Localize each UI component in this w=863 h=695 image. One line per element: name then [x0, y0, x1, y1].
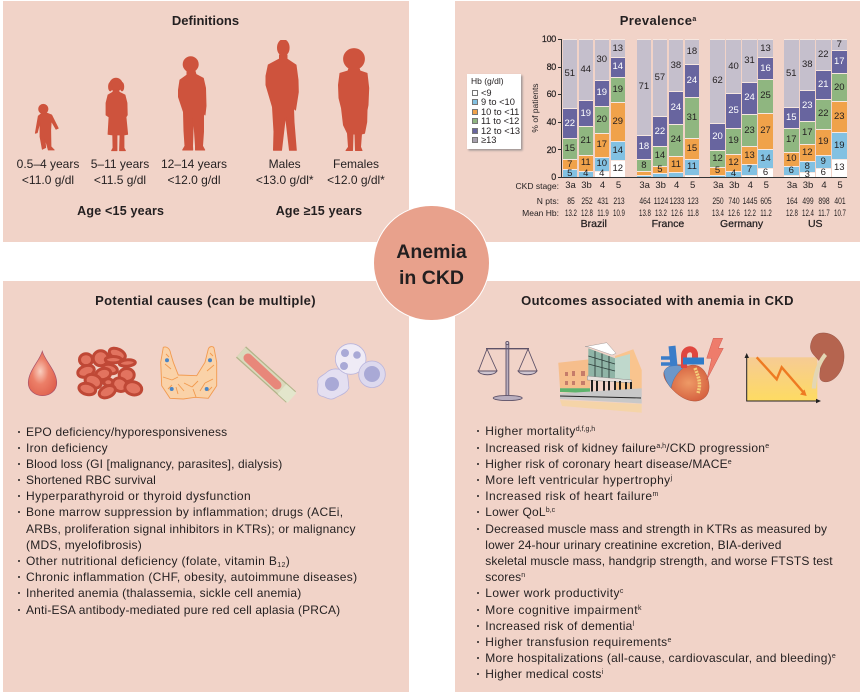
country: Brazil [563, 39, 625, 230]
label: males: Males [269, 157, 301, 171]
country: US: 6 [821, 167, 826, 178]
list: outcomes: Higher mortalityd,f,g,h [485, 424, 595, 438]
y axis labels: 20 [547, 144, 556, 154]
y axis labels: 100 [542, 34, 556, 44]
y axis labels [542, 34, 556, 182]
country: US: 898 [818, 196, 830, 206]
label: females: Females [333, 157, 379, 171]
country: Brazil: 13 [612, 43, 623, 54]
country: US: 6 [789, 165, 794, 176]
country: Brazil: 7 [567, 159, 572, 170]
country: France: 3b [655, 180, 666, 191]
panel: prevalence [455, 1, 860, 242]
list: outcomes: Lower QoLb,c [485, 505, 555, 519]
icon: parathyroid gland [161, 347, 217, 399]
icon: girl [106, 78, 128, 151]
country: US: 21 [818, 79, 829, 90]
label: 12–14 years: <12.0 g/dl [167, 173, 221, 187]
country: US: 3b [803, 180, 813, 191]
country: Brazil: 15 [564, 143, 575, 154]
country: Brazil: Brazil [581, 218, 607, 230]
axis title: % of patients [530, 83, 540, 133]
country: Brazil: 44 [580, 64, 591, 75]
legend: 12 to <13 [481, 126, 520, 136]
country: Brazil: 19 [612, 84, 623, 95]
country: US: 13 [834, 162, 845, 173]
country: Germany: 250 [713, 196, 724, 206]
country: France: 22 [655, 126, 665, 137]
icon: declining chart and kidney [744, 333, 844, 403]
group label: age 15 and over: Age ≥15 years [276, 204, 362, 218]
country: Germany: 3a [713, 180, 724, 191]
country: Germany: 40 [728, 61, 739, 72]
icon: hospital building [558, 343, 642, 413]
label: males: <13.0 g/dl* [256, 173, 314, 187]
country: Brazil: 3a [565, 180, 576, 191]
country: Brazil: 10.9 [613, 208, 624, 218]
label: males [256, 157, 314, 187]
icons: causes [28, 343, 386, 402]
country: Brazil: 29 [612, 116, 623, 127]
country: France: 24 [671, 134, 681, 145]
country: US: 9 [821, 156, 826, 167]
country: Brazil: 21 [580, 135, 591, 146]
country: Germany: 605 [761, 196, 772, 206]
country: Germany: 13.4 [712, 208, 724, 218]
country: Germany: 23 [744, 125, 755, 136]
list: outcomes: Higher medical costsi [485, 667, 603, 681]
country: Brazil: 14 [612, 145, 623, 156]
list: outcomes: Increased risk of kidney failurea,h/CKD progressione [485, 441, 769, 455]
country: US: 12.4 [802, 208, 814, 218]
country: Germany: 13 [744, 150, 755, 161]
country: France: 1124 [653, 196, 668, 206]
country: US: 23 [834, 111, 845, 122]
icon: boy [178, 57, 206, 150]
country: US: 12 [802, 147, 813, 158]
country: US: 20 [834, 82, 845, 93]
country: US: 22 [818, 108, 829, 119]
country: Brazil: 5 [567, 168, 572, 179]
list: outcomes: skeletal muscle mass, handgrip strength, and worse FTSTS test [485, 554, 833, 568]
list: causes: EPO deficiency/hyporesponsiveness [26, 425, 227, 439]
country: France: 1233 [669, 196, 684, 206]
label: 5–11 years: <11.5 g/dl [94, 173, 146, 187]
country: Brazil: 431 [597, 196, 608, 206]
country: US: 38 [802, 59, 813, 70]
country: US: 51 [786, 68, 797, 79]
country: France: 24 [671, 102, 681, 113]
legend: <9 [481, 88, 492, 98]
label: 0.5–4 years [17, 157, 79, 187]
country: France [637, 39, 699, 230]
list: outcomes: More hospitalizations (all-cause, cardiovascular, and bleeding)e [485, 651, 836, 665]
country: Brazil: 4 [599, 168, 604, 179]
country: France: 15 [687, 143, 697, 154]
y axis labels: 80 [547, 62, 556, 72]
panel: outcomes [455, 281, 860, 692]
country: US: 3 [805, 169, 810, 180]
list: causes: Chronic inflammation (CHF, obesity, autoimmune diseases) [26, 570, 357, 584]
country: Brazil: 85 [567, 196, 574, 206]
icon: adult male [266, 40, 298, 150]
country: Brazil: 13.2 [565, 208, 576, 218]
list: outcomes: Lower work productivityc [485, 586, 623, 600]
country: Brazil: 51 [564, 68, 575, 79]
list: outcomes: More left ventricular hypertrophyj [485, 473, 672, 487]
legend: 10 to <11 [481, 107, 519, 117]
row labels: N pts: [537, 196, 559, 206]
icon: adult female [338, 49, 369, 150]
country: France: 3a [639, 180, 650, 191]
country: Brazil: 12 [612, 163, 623, 174]
country: Brazil: 19 [580, 108, 591, 119]
country: Brazil: 213 [613, 196, 624, 206]
country: Germany: 20 [712, 131, 723, 142]
list: causes: Bone marrow suppression by inflammation; drugs (ACEi, [26, 505, 343, 519]
list: causes: ARBs, proliferation signal inhibitors in KTRs); or malignancy [26, 522, 356, 536]
heading: outcomes: Outcomes associated with anemia in CKD [521, 293, 794, 308]
country: France: 13.8 [639, 208, 651, 218]
country: Germany: 19 [728, 135, 739, 146]
panel: potential causes [3, 281, 408, 692]
country: US: 17 [802, 127, 813, 138]
country: Germany: 12 [728, 157, 739, 168]
legend: Hb (g/dl) [471, 76, 504, 86]
country: Brazil: 3b [581, 180, 592, 191]
country: Germany: 740 [729, 196, 740, 206]
heading: prevalence: Prevalencea [620, 13, 696, 28]
stacked bar chart [516, 34, 847, 230]
country: Brazil: 5 [616, 180, 621, 191]
row labels: Mean Hb: [522, 208, 559, 218]
y axis labels: 40 [547, 117, 556, 127]
legend: ≥13 [481, 135, 496, 145]
country: Germany: 25 [728, 105, 739, 116]
icon: heart and lightning [661, 338, 723, 401]
country: Germany: 12 [712, 153, 723, 164]
country: France: 18 [687, 46, 697, 57]
country: Germany: 14 [760, 153, 771, 164]
country: France: 11 [671, 159, 681, 170]
country: US: US [808, 218, 823, 230]
country: Germany: 7 [747, 164, 752, 175]
center circle: Anemia in CKD [373, 205, 490, 321]
country: France: 11 [687, 161, 697, 172]
y axis labels: 60 [547, 89, 556, 99]
label: 5–11 years [91, 157, 149, 187]
list: outcomes: lower 24-hour urinary creatinine excretion, BIA-derived [485, 538, 782, 552]
country: US: 19 [818, 136, 829, 147]
country: Germany: 13 [760, 43, 771, 54]
center circle: Anemia in CKD: in CKD [399, 267, 464, 289]
country: US: 8 [805, 161, 810, 172]
country: US: 15 [786, 112, 797, 123]
panel: definitions [3, 1, 408, 242]
country: France: 18 [639, 141, 649, 152]
country: France: 31 [687, 112, 697, 123]
list: outcomes: Decreased muscle mass and strength in KTRs as measured by [485, 522, 827, 536]
icon: red blood cells [76, 346, 143, 400]
heading: definitions: Definitions [172, 13, 239, 28]
country: Brazil: 17 [596, 139, 607, 150]
list: causes: Inherited anemia (thalassemia, sickle cell anemia) [26, 586, 301, 600]
country: Germany: 11.2 [761, 208, 772, 218]
legend: 11 to <12 [481, 116, 519, 126]
country: Brazil: 22 [564, 118, 575, 129]
icon: white blood cells [318, 344, 385, 399]
country: Germany: 62 [712, 75, 723, 86]
country: France: 8 [641, 160, 647, 171]
list: causes: Blood loss (GI [malignancy, parasites], dialysis) [26, 457, 282, 471]
heading: potential causes: Potential causes (can be multiple) [95, 293, 316, 308]
icons: people silhouettes [34, 40, 370, 152]
list: causes: Shortened RBC survival [26, 473, 156, 487]
icon: scales [478, 342, 537, 401]
country: US: 10 [786, 153, 797, 164]
icon: blood vessel [241, 352, 292, 398]
country: US: 5 [837, 180, 843, 191]
country: France: 5 [690, 180, 695, 191]
country: Germany: Germany [720, 218, 763, 230]
country: Germany: 3b [729, 180, 740, 191]
country: US [784, 39, 847, 230]
country: France: 14 [655, 150, 665, 161]
country: Brazil: 30 [596, 54, 607, 65]
country: France: 13.2 [655, 208, 667, 218]
country: France: 57 [655, 72, 665, 83]
country: Germany: 16 [760, 63, 771, 74]
country: US: 19 [834, 140, 845, 151]
country: France: 11.8 [687, 208, 698, 218]
list: outcomes: Increased risk of heart failurem [485, 489, 658, 503]
country: Germany: 6 [763, 167, 768, 178]
list: outcomes [477, 424, 836, 681]
list: causes: Hyperparathyroid or thyroid dysfunction [26, 489, 251, 503]
country: Brazil: 14 [612, 61, 623, 72]
country: Germany: 12.2 [744, 208, 756, 218]
country: US: 22 [818, 49, 829, 60]
country: Brazil: 4 [600, 180, 605, 191]
label: 5–11 years: 5–11 years [91, 157, 149, 171]
country: US: 12.8 [786, 208, 798, 218]
list: outcomes: Increased risk of demential [485, 619, 634, 633]
country: Germany: 5 [764, 180, 769, 191]
country: US: 10.7 [834, 208, 846, 218]
country: Brazil: 11.9 [597, 208, 608, 218]
country: Brazil: 10 [596, 158, 607, 169]
label: 12–14 years [161, 157, 227, 187]
list: causes: Iron deficiency [26, 441, 108, 455]
country: Germany: 4 [748, 180, 753, 191]
list: outcomes: More cognitive impairmentk [485, 603, 642, 617]
country: US: 401 [834, 196, 846, 206]
country: Germany: 12.6 [728, 208, 740, 218]
icon: toddler [35, 104, 58, 150]
list: outcomes: scoresn [485, 570, 525, 584]
country: Brazil: 11 [581, 157, 591, 168]
country: France: 24 [687, 75, 697, 86]
legend: 9 to <10 [481, 97, 515, 107]
list: causes: (MDS, myelofibrosis) [26, 538, 142, 552]
country: Germany: 27 [760, 125, 771, 136]
country: France: 4 [674, 180, 679, 191]
label: 0.5–4 years: <11.0 g/dl [22, 173, 74, 187]
list: outcomes: Higher transfusion requirementse [485, 635, 671, 649]
country: Germany [710, 39, 773, 230]
country: Germany: 24 [744, 92, 755, 103]
list: causes: Anti-ESA antibody-mediated pure red cell aplasia (PRCA) [26, 603, 340, 617]
center circle: Anemia in CKD: Anemia [396, 241, 467, 263]
country: Germany: 4 [731, 168, 736, 179]
country: Germany: 31 [744, 55, 755, 66]
country: US: 4 [821, 180, 827, 191]
country: Brazil: 252 [581, 196, 592, 206]
country: US: 17 [786, 134, 797, 145]
icons: outcomes [477, 332, 844, 413]
country: US: 17 [834, 56, 845, 67]
country: US: 11.7 [818, 208, 830, 218]
list: causes [18, 425, 357, 617]
legend [467, 74, 521, 149]
country: France: France [652, 218, 684, 230]
label: 0.5–4 years: 0.5–4 years [17, 157, 79, 171]
list: causes: Other nutritional deficiency (folate, vitamin B12) [26, 554, 290, 569]
label: 12–14 years: 12–14 years [161, 157, 227, 171]
country: US: 23 [802, 100, 813, 111]
country: France: 71 [639, 81, 649, 92]
icon: blood drop [28, 351, 57, 396]
country: Germany: 25 [760, 90, 771, 101]
list: outcomes: Higher risk of coronary heart disease/MACEe [485, 457, 732, 471]
country: Germany: 1445 [743, 196, 758, 206]
country: Brazil: 20 [596, 114, 607, 125]
country: US: 7 [837, 39, 842, 50]
country: France: 123 [687, 196, 698, 206]
country: US: 3a [787, 180, 797, 191]
label: females [327, 157, 385, 187]
country: Brazil: 19 [596, 87, 607, 98]
country: France: 5 [657, 164, 663, 175]
y axis labels: 0 [551, 172, 556, 182]
country: US: 499 [802, 196, 814, 206]
country: France: 12.6 [671, 208, 683, 218]
group label: age under 15: Age <15 years [77, 204, 164, 218]
country: France: 464 [639, 196, 650, 206]
row labels: CKD stage: [516, 181, 559, 191]
label: females: <12.0 g/dl* [327, 173, 385, 187]
row labels [516, 181, 559, 218]
country: Brazil: 4 [583, 168, 588, 179]
country: US: 164 [786, 196, 798, 206]
country: France: 38 [671, 60, 681, 70]
country: Brazil: 12.8 [581, 208, 592, 218]
country: Germany: 5 [715, 165, 720, 176]
